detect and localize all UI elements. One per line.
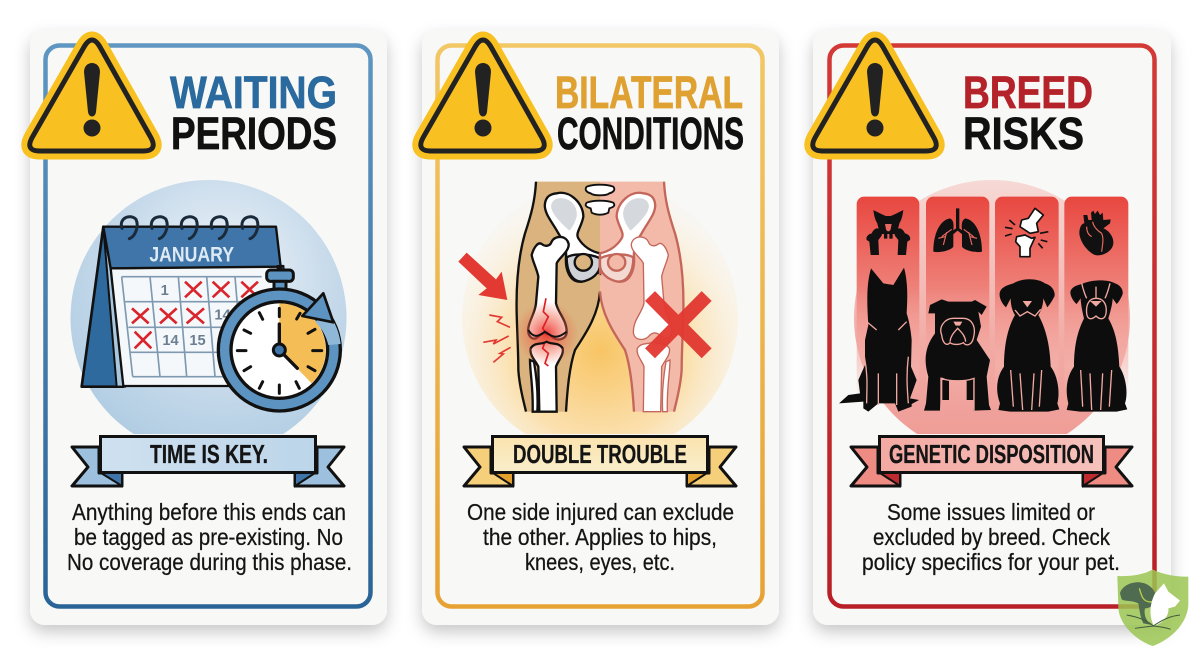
panel: breed risks: [813, 30, 1171, 625]
red cross: [650, 296, 707, 353]
dog: boxer: [1067, 280, 1127, 412]
condition columns: [857, 197, 1128, 397]
text: breed risk description: policy specifics for your pet.: [862, 549, 1120, 575]
illustration glow circle: [462, 214, 738, 434]
ribbon: genetic disposition: GENETIC DISPOSITION: [889, 439, 1094, 469]
text: breed risk description: [862, 499, 1120, 575]
text: breed risk description: excluded by breed. Check: [873, 524, 1110, 550]
dog: bulldog: [924, 299, 991, 411]
icon: calendar: 15: [189, 333, 206, 349]
icon: stopwatch: [218, 265, 341, 411]
icon: calendar: [82, 217, 287, 387]
icon: calendar: 1: [161, 283, 169, 299]
heading: bilateral conditions: CONDITIONS: [557, 108, 744, 159]
icon: warning triangle: [30, 40, 153, 151]
panel: bilateral conditions: [421, 30, 779, 625]
icon: heart: [1079, 211, 1113, 255]
spine vertebrae: [586, 185, 614, 215]
text: waiting period description: No coverage during this phase.: [67, 549, 352, 575]
left leg skin: [517, 182, 600, 412]
illustration: hips and legs: [458, 182, 707, 412]
text: bilateral description: [467, 499, 734, 575]
heading: waiting periods: PERIODS: [171, 108, 337, 159]
ribbon: time is key: TIME IS KEY.: [150, 439, 268, 469]
heading: waiting periods: [170, 67, 337, 159]
dog: rottweiler: [997, 279, 1059, 412]
heading: breed risks: BREED: [963, 67, 1093, 118]
card frame: [438, 46, 762, 606]
heading: bilateral conditions: [555, 67, 744, 159]
icon: calendar: JANUARY: [149, 243, 234, 267]
card background: [813, 30, 1171, 625]
left bones: [528, 193, 600, 412]
knee inflammation: [515, 302, 578, 365]
text: breed risk description: Some issues limited or: [887, 499, 1095, 525]
panel: waiting periods: [30, 30, 387, 625]
text: waiting period description: be tagged as pre-existing. No: [74, 524, 343, 550]
text: bilateral description: knees, eyes, etc.: [525, 549, 675, 575]
icon: warning triangle: [421, 40, 544, 151]
icon: pelvis: [866, 210, 910, 255]
icon: lungs: [933, 208, 982, 252]
heading: breed risks: [963, 67, 1093, 159]
card background: [422, 30, 779, 625]
card frame: [830, 46, 1154, 606]
illustration background circle: [854, 180, 1130, 456]
text: waiting period description: Anything before this ends can: [72, 499, 346, 525]
heading: breed risks: RISKS: [963, 108, 1084, 159]
ribbon: double trouble: [464, 436, 736, 486]
icon: warning triangle: [813, 40, 936, 151]
ribbon: double trouble: DOUBLE TROUBLE: [513, 439, 687, 469]
ribbon: time is key: [72, 436, 344, 486]
illustration: breeds and conditions: [839, 197, 1128, 412]
text: waiting period description: [67, 499, 352, 575]
right bones: [600, 193, 672, 412]
icon: calendar: 14: [214, 307, 231, 323]
ribbon: genetic disposition: [851, 436, 1132, 486]
card frame: [46, 46, 370, 606]
icon: knee joint: [1005, 208, 1048, 257]
dog: german shepherd: [839, 268, 919, 412]
heading: waiting periods: WAITING: [170, 67, 337, 118]
right leg skin: [600, 182, 683, 412]
text: bilateral description: the other. Applies to hips,: [483, 524, 717, 550]
text: bilateral description: One side injured can exclude: [467, 499, 734, 525]
heading: bilateral conditions: BILATERAL: [555, 67, 743, 118]
pain zigzags: [483, 315, 511, 362]
illustration background circle: [70, 180, 346, 456]
logo: pet shield: [1117, 569, 1188, 646]
card background: [30, 30, 387, 625]
icon: calendar: 14: [162, 333, 179, 349]
red arrow: [458, 253, 507, 300]
